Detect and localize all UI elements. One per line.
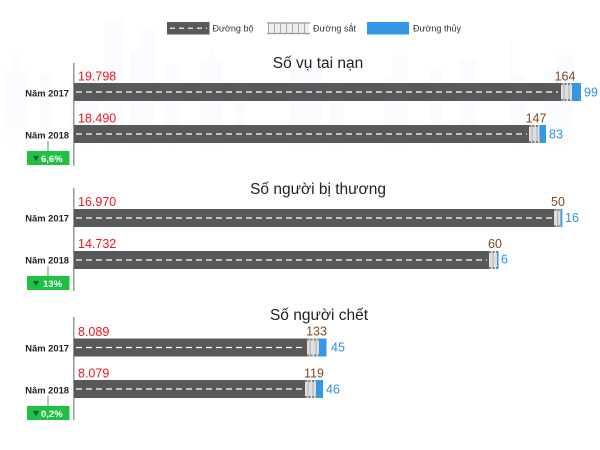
badge: 6,6%: 6,6% <box>41 154 63 165</box>
row: 2017: Năm 2017 <box>25 212 69 224</box>
row: 2018 <box>25 112 563 143</box>
legend: water label: Đường thủy <box>413 24 461 34</box>
row: 2018 <box>25 237 508 269</box>
panel: Số vụ tai nạn <box>25 55 598 166</box>
row: 2017: 164 <box>555 70 575 84</box>
row: 2017: 99 <box>584 86 598 100</box>
row: 2018: Năm 2018 <box>25 254 69 266</box>
badge: 13% <box>27 266 70 290</box>
badge: 0,2% <box>27 396 70 420</box>
axis <box>73 188 74 291</box>
row: 2017: Năm 2017 <box>25 88 69 98</box>
badge: 13%: 13% <box>43 279 63 290</box>
row: 2018: 46 <box>326 382 340 396</box>
row: 2018: 8.079 <box>78 366 109 380</box>
row: 2017: 16.970 <box>78 195 116 209</box>
row: 2017 <box>25 324 345 356</box>
heading: Số người bị thương <box>250 181 386 198</box>
panel: Số người chết <box>25 307 369 420</box>
row: 2017: 8.089 <box>78 325 109 339</box>
row: 2018: 147 <box>526 112 546 126</box>
panel: Số người bị thương <box>25 181 579 291</box>
badge: 6,6% <box>27 141 70 165</box>
badge: 0,2%: 0,2% <box>41 409 63 420</box>
row: 2017: 16 <box>565 211 579 225</box>
row: 2017: 133 <box>306 324 327 338</box>
row: 2017 <box>25 70 598 101</box>
legend: road label: Đường bộ <box>212 24 253 34</box>
row: 2018: 14.732 <box>78 237 116 251</box>
row: 2018: Năm 2018 <box>25 384 69 396</box>
axis <box>73 317 74 420</box>
axis <box>73 63 74 166</box>
row: 2018: 18.490 <box>78 112 116 126</box>
legend: rail label: Đường sắt <box>313 24 356 34</box>
legend: rail swatch <box>267 22 310 34</box>
row: 2017: 45 <box>331 340 345 354</box>
heading: Số vụ tai nạn <box>273 55 363 72</box>
heading: Số người chết <box>270 307 369 324</box>
legend: water swatch <box>367 22 409 34</box>
row: 2017: 50 <box>551 195 565 209</box>
row: 2017: 19.798 <box>78 70 116 84</box>
row: 2017 <box>25 195 579 227</box>
row: 2018: 119 <box>304 366 324 380</box>
row: 2017: Năm 2017 <box>25 342 69 354</box>
row: 2018: 83 <box>549 128 563 142</box>
legend <box>167 22 461 34</box>
row: 2018: 60 <box>488 237 502 251</box>
legend: road swatch <box>167 22 210 34</box>
row: 2018: 6 <box>501 252 508 266</box>
row: 2018 <box>25 366 340 398</box>
row: 2018: Năm 2018 <box>25 130 69 140</box>
